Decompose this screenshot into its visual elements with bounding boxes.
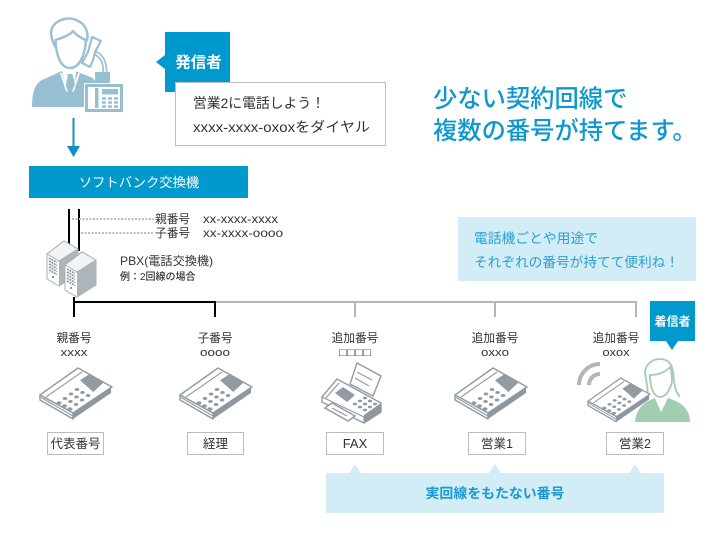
receiver tag [650, 301, 695, 350]
arrow: down to exchange [67, 118, 80, 157]
headline: 複数の番号が持てます。 [433, 118, 697, 145]
trunk lines and numbers: xx-xxxx-xxxx [203, 214, 278, 226]
extension: main number: xxxx [60, 347, 88, 359]
band: numbers without real lines [326, 464, 664, 513]
extension: sales 2 [593, 331, 664, 454]
extension: main number [40, 332, 112, 454]
info callout [458, 217, 696, 281]
icon: receiver woman [635, 359, 690, 422]
extension: child number [180, 332, 252, 454]
softbank exchange bar: ソフトバンク交換機 [79, 175, 199, 190]
extension: sales 1: 追加番号 [472, 331, 519, 345]
extension: fax: □□□□ [339, 347, 372, 359]
caller tag: 発信者 [175, 54, 222, 72]
trunk lines and numbers [68, 209, 283, 251]
info callout: それぞれの番号が持てて便利ね！ [474, 255, 679, 270]
headline [433, 86, 697, 145]
extension: sales 1: 営業1 [481, 436, 513, 451]
speech box: dial instruction [176, 82, 386, 146]
extension: fax: 追加番号 [332, 331, 379, 345]
trunk lines and numbers: 親番号 [155, 213, 190, 226]
speech box: dial instruction: 営業2に電話しよう！ [193, 95, 325, 111]
extension: sales 2: oxox [602, 347, 630, 359]
extension: fax: FAX [343, 436, 368, 451]
extension: sales 2: 営業2 [619, 436, 651, 451]
PBX label: PBX(電話交換機) [120, 254, 213, 268]
speech box: dial instruction: xxxx-xxxx-oxoxをダイヤル [193, 119, 370, 135]
softbank exchange bar [29, 166, 248, 198]
info callout: 電話機ごとや用途で [474, 231, 598, 246]
extension: sales 1 [455, 331, 527, 454]
distribution lines [73, 297, 637, 317]
caller tag [156, 32, 230, 92]
icon: ringing phone [579, 364, 650, 422]
extension: main number: 親番号 [56, 332, 92, 345]
extension: child number: oooo [200, 347, 230, 359]
receiver tag: 着信者 [654, 314, 691, 328]
icon: caller with phone [32, 19, 124, 113]
trunk lines and numbers: 子番号 [155, 227, 190, 240]
extension: sales 1: oxxo [481, 347, 509, 359]
headline: 少ない契約回線で [433, 86, 627, 113]
PBX label [120, 254, 213, 283]
trunk lines and numbers: xx-xxxx-oooo [203, 228, 283, 240]
extension: child number: 経理 [203, 437, 228, 451]
icon: PBX servers [47, 241, 96, 297]
extension: child number: 子番号 [197, 332, 233, 345]
PBX label: 例：2回線の場合 [120, 270, 196, 283]
extension: fax [322, 331, 384, 454]
extension: sales 2: 追加番号 [593, 331, 640, 345]
extension: main number: 代表番号 [50, 437, 101, 451]
band: numbers without real lines: 実回線をもたない番号 [426, 485, 565, 501]
